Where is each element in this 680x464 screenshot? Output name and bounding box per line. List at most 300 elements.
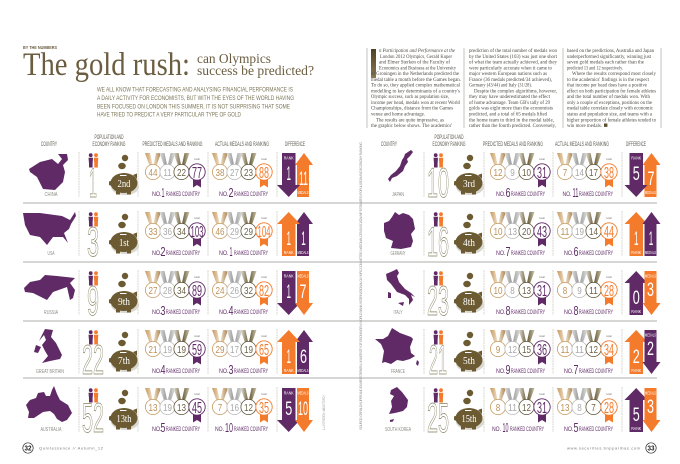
predicted medals: NO.: [496, 251, 506, 257]
difference arrows: RANK: [284, 250, 294, 255]
predicted medals: 77: [192, 165, 202, 182]
predicted medals: NO.: [496, 192, 506, 198]
difference arrows: MEDALS: [645, 274, 656, 278]
footer: left page: Quintessence // Autumn_12: [39, 446, 104, 450]
actual medals: total: [606, 157, 612, 161]
difference arrows: 3: [647, 280, 654, 301]
actual medals: [212, 212, 272, 259]
column headers: left page: ACTUAL MEDALS AND RANKING: [215, 141, 269, 148]
predicted medals: [490, 330, 550, 377]
population and economy rank: [87, 212, 139, 265]
population and economy rank: [88, 153, 139, 206]
actual medals: 28: [604, 283, 614, 300]
actual medals: 23: [244, 167, 253, 179]
actual medals: 19: [575, 226, 584, 238]
predicted medals: RANKED COUNTRY: [166, 369, 200, 375]
article text columns: the home team to third in the medal table,: [469, 117, 555, 123]
footer: left page: 32: [24, 446, 32, 453]
article text columns: modelling to key determinants of a country's: [371, 87, 460, 94]
map: South Korea: [389, 387, 408, 422]
article text columns: [367, 47, 661, 129]
actual medals: [557, 212, 617, 259]
actual medals: 11: [589, 285, 598, 297]
actual medals: total: [606, 275, 612, 279]
difference arrows: 1: [286, 282, 291, 303]
predicted medals: NO.: [152, 192, 162, 198]
predicted medals: 20: [522, 226, 531, 238]
predicted medals: 8: [506, 303, 510, 318]
difference arrows: 7: [648, 169, 654, 190]
article text columns: only a couple of exceptions, positions on the: [567, 99, 653, 106]
population and economy rank: 2nd: [118, 179, 130, 190]
actual medals: 8: [574, 303, 578, 318]
actual medals: RANKED COUNTRY: [579, 310, 613, 316]
difference arrows: [277, 153, 313, 197]
actual medals: 7: [591, 402, 596, 414]
row: Italy: [386, 269, 660, 324]
predicted medals: 13: [508, 226, 517, 238]
actual medals: [212, 153, 272, 200]
difference arrows: [624, 153, 660, 197]
actual medals: total: [606, 334, 612, 338]
predicted medals: NO.: [496, 310, 506, 316]
predicted medals: 12: [494, 167, 503, 179]
row: China: [29, 152, 313, 206]
population and economy rank: 9: [87, 277, 99, 324]
actual medals: 38: [604, 165, 614, 182]
actual medals: 14: [589, 226, 598, 238]
row: Russia: [24, 270, 313, 324]
difference arrows: RANK: [284, 156, 294, 160]
predicted medals: RANKED COUNTRY: [166, 427, 200, 433]
predicted medals: NO.: [496, 369, 506, 375]
map: USA: [23, 212, 76, 245]
population and economy rank: 13th: [116, 414, 132, 425]
predicted medals: RANKED COUNTRY: [166, 251, 200, 257]
difference arrows: MEDALS: [645, 190, 656, 195]
row: Russia: RUSSIA: [44, 310, 58, 316]
actual medals: NO.: [219, 192, 229, 198]
actual medals: RANKED COUNTRY: [234, 251, 268, 257]
difference arrows: RANK: [631, 250, 642, 255]
predicted medals: NO.: [152, 369, 162, 375]
intro paragraph: BEEN FOCUSED ON LONDON THIS SUMMER, IT IS NOT SURPRISING THAT SOME: [97, 103, 290, 110]
difference arrows: RANK: [631, 309, 642, 314]
actual medals: [557, 153, 617, 200]
predicted medals: 13: [148, 402, 158, 414]
predicted medals: total: [194, 216, 200, 220]
predicted medals: [490, 388, 550, 435]
predicted medals: 89: [192, 283, 202, 300]
article text columns: France (36 medals predicted/34 achieved),: [469, 76, 553, 83]
predicted medals: RANKED COUNTRY: [511, 192, 545, 198]
predicted medals: 59: [192, 342, 202, 359]
actual medals: 17: [230, 344, 239, 356]
predicted medals: [145, 271, 205, 318]
predicted medals: total: [194, 157, 200, 161]
article text columns: Germany (43/44) and Italy (31/28).: [469, 82, 532, 89]
article text columns: of Groningen in the Netherlands predicted the: [371, 70, 460, 77]
actual medals: 13: [560, 402, 570, 414]
population and economy rank: 4th: [463, 238, 475, 249]
predicted medals: total: [539, 392, 545, 396]
footer: right page: www.securities.bnpparibas.com: [567, 446, 641, 450]
predicted medals: RANKED COUNTRY: [510, 427, 544, 433]
difference arrows: RANK: [284, 274, 294, 278]
actual medals: 88: [259, 165, 269, 182]
column headers: left page: POPULATION AND: [94, 134, 124, 141]
predicted medals: 27: [148, 285, 158, 297]
population and economy rank: 25: [427, 394, 449, 441]
actual medals: [212, 388, 272, 435]
predicted medals: 11: [164, 167, 172, 179]
article text columns: underperformed significantly, winning just: [567, 53, 651, 60]
actual medals: RANKED COUNTRY: [234, 192, 268, 198]
difference arrows: RANK: [284, 390, 294, 396]
predicted medals: 28: [163, 285, 172, 297]
actual medals: 7: [218, 402, 222, 414]
actual medals: total: [606, 392, 612, 396]
predicted medals: 21: [148, 344, 158, 356]
difference arrows: 2: [633, 347, 640, 368]
actual medals: RANKED COUNTRY: [579, 192, 613, 198]
row: South Korea: [385, 387, 660, 441]
actual medals: NO.: [564, 427, 574, 433]
title: can Olympics: [197, 52, 271, 67]
difference arrows: [277, 212, 313, 256]
difference arrows: 5: [285, 399, 292, 420]
article text columns: based on the predictions, Australia and Japan: [567, 48, 654, 54]
article text columns: medal table correlate closely with economic: [567, 106, 654, 112]
actual medals: 8: [577, 402, 582, 414]
difference arrows: [277, 271, 313, 315]
article text columns: Despite the complex algorithms, however,: [474, 88, 558, 94]
actual medals: RANKED COUNTRY: [579, 251, 613, 257]
column headers: left page: PREDICTED MEDALS AND RANKING: [142, 141, 203, 148]
population and economy rank: 7th: [118, 356, 130, 367]
difference arrows: 2: [647, 339, 654, 360]
predicted medals: [145, 212, 205, 259]
predicted medals: [145, 388, 205, 435]
actual medals: 26: [230, 285, 239, 297]
title: success be predicted?: [197, 64, 314, 79]
predicted medals: RANKED COUNTRY: [166, 192, 200, 198]
predicted medals: 34: [177, 226, 186, 238]
predicted medals: total: [539, 157, 545, 161]
article text columns: they may have underestimated the effect: [469, 93, 550, 100]
actual medals: 46: [216, 226, 225, 238]
population and economy rank: 8th: [463, 297, 475, 308]
predicted medals: 36: [537, 342, 547, 359]
article text columns: Championships, distance from the Games: [371, 105, 453, 112]
population and economy rank: 3: [87, 218, 99, 265]
row: Great Britain: GREAT BRITAIN: [36, 369, 64, 375]
map: Italy: [386, 269, 415, 306]
predicted medals: total: [539, 275, 545, 279]
actual medals: 38: [216, 167, 225, 179]
article text columns: income per head, medals won at recent World: [371, 100, 460, 106]
predicted medals: RANKED COUNTRY: [166, 310, 200, 316]
actual medals: NO.: [564, 251, 574, 257]
row: USA: USA: [48, 251, 55, 257]
predicted medals: [490, 153, 550, 200]
source credit: SOURCE: GERALD KUPER AND ELMER STERKEN, UNIVERSITY OF GRONINGEN; WORLD BANK; INTERNATIONAL OLYMPIC COMMITTEE; NATIONAL CENSUS DATA; IMF ESTIMATES; POPULATION AND ECONOMY RANKING: [359, 142, 363, 430]
article text columns: the graphic below shows. The academics': [371, 123, 452, 129]
actual medals: total: [261, 334, 267, 338]
predicted medals: 12: [508, 344, 517, 356]
actual medals: 44: [604, 224, 614, 241]
predicted medals: 5: [160, 420, 166, 435]
population and economy rank: 1: [89, 159, 97, 206]
difference arrows: [624, 330, 660, 374]
column headers: right page: ECONOMY RANKING: [432, 141, 466, 148]
predicted medals: 22: [177, 167, 186, 179]
actual medals: 17: [589, 167, 598, 179]
article text columns: Where the results correspond most closely: [572, 71, 656, 77]
actual medals: [557, 271, 617, 318]
difference arrows: MEDALS: [298, 390, 308, 396]
actual medals: NO.: [562, 192, 572, 198]
difference arrows: 7: [300, 282, 306, 303]
predicted medals: total: [539, 216, 545, 220]
row: Australia: [26, 386, 313, 441]
actual medals: 8: [563, 285, 567, 297]
article text columns: medal table a month before the Games began.: [371, 76, 461, 83]
row: France: FRANCE: [391, 369, 405, 375]
actual medals: 11: [560, 344, 570, 356]
article text columns: London 2012 Olympics, Gerald Kuper: [380, 54, 452, 60]
difference arrows: MEDALS: [298, 190, 308, 195]
actual medals: 12: [589, 344, 598, 356]
predicted medals: 10: [494, 226, 503, 238]
predicted medals: 44: [148, 167, 158, 179]
intro paragraph: WE ALL KNOW THAT FORECASTING AND ANALYSING FINANCIAL PERFORMANCE IS: [97, 86, 293, 94]
difference arrows: 1: [286, 229, 291, 250]
predicted medals: 19: [163, 402, 172, 414]
actual medals: total: [261, 275, 267, 279]
predicted medals: 19: [177, 344, 186, 356]
predicted medals: 3: [160, 303, 166, 318]
actual medals: total: [261, 392, 267, 396]
actual medals: 34: [604, 342, 614, 359]
population and economy rank: 22: [82, 336, 104, 383]
actual medals: total: [261, 157, 267, 161]
predicted medals: 9: [506, 362, 510, 377]
footer: right page: 33: [648, 446, 655, 453]
predicted medals: 43: [537, 224, 547, 241]
predicted medals: [145, 330, 205, 377]
row: USA: [23, 211, 313, 265]
column headers: right page: ACTUAL MEDALS AND RANKING: [555, 141, 609, 148]
actual medals: 1: [230, 244, 232, 259]
difference arrows: [624, 271, 660, 315]
actual medals: NO.: [219, 251, 229, 257]
article text columns: that income per head does have a positive: [567, 83, 648, 89]
article text columns: effect on both participation for female athletes: [567, 87, 656, 94]
actual medals: RANKED COUNTRY: [579, 369, 613, 375]
actual medals: total: [261, 216, 267, 220]
population and economy rank: 21: [429, 336, 447, 383]
predicted medals: 11: [508, 402, 517, 414]
actual medals: 9: [577, 285, 582, 297]
map: Russia: [24, 275, 75, 300]
population and economy rank: 9th: [118, 297, 130, 308]
map: France: [375, 328, 419, 366]
article text columns: of home advantage. Team GB's tally of 29: [469, 99, 550, 106]
difference arrows: 1: [286, 347, 291, 368]
difference arrows: 1: [301, 229, 306, 250]
population and economy rank: 5th: [463, 356, 475, 367]
predicted medals: 36: [163, 226, 172, 238]
row: Germany: [384, 211, 660, 265]
row: Japan: [388, 150, 660, 206]
difference arrows: 5: [633, 405, 640, 426]
population and economy rank: 10: [427, 159, 449, 206]
predicted medals: RANKED COUNTRY: [511, 369, 545, 375]
predicted medals: 34: [177, 285, 186, 297]
predicted medals: NO.: [152, 310, 162, 316]
actual medals: 11: [560, 226, 570, 238]
column headers: left page: COUNTRY: [41, 141, 57, 148]
predicted medals: total: [194, 275, 200, 279]
actual medals: 27: [230, 167, 239, 179]
title: [23, 47, 314, 83]
actual medals: [557, 330, 617, 377]
actual medals: 32: [244, 285, 253, 297]
actual medals: NO.: [564, 369, 574, 375]
actual medals: 29: [244, 226, 253, 238]
predicted medals: 31: [537, 165, 547, 182]
article text columns: seven gold medals each rather than the: [567, 60, 645, 66]
difference arrows: 6: [300, 347, 307, 368]
intro paragraph: HAVE TRIED TO PREDICT A VERY PARTICULAR TYPE OF GOLD: [97, 112, 241, 119]
article text columns: of what the team actually achieved, and they: [469, 58, 557, 66]
actual medals: 7: [574, 362, 578, 377]
predicted medals: RANKED COUNTRY: [511, 310, 545, 316]
row: Australia: AUSTRALIA: [40, 427, 62, 433]
predicted medals: total: [194, 392, 200, 396]
predicted medals: 15: [522, 344, 531, 356]
article text columns: golds was eight more than the economists: [469, 106, 553, 112]
article text columns: Economics and Business at the University: [379, 65, 456, 71]
article text columns: n Participation and Performance at the: [379, 47, 456, 54]
map: Australia: [26, 386, 72, 422]
actual medals: [557, 388, 617, 435]
difference arrows: MEDALS: [298, 274, 308, 278]
actual medals: 29: [230, 226, 239, 238]
section kicker: BY THE NUMBERS: [23, 45, 57, 50]
difference arrows: RANK: [284, 368, 294, 373]
predicted medals: 9: [496, 344, 500, 356]
difference arrows: 1: [649, 229, 653, 250]
illustration credit: ILLUSTRATION: MAGICTORCH: [322, 395, 326, 430]
difference arrows: MEDALS: [645, 250, 656, 255]
predicted medals: NO.: [152, 427, 162, 433]
actual medals: 104: [258, 224, 271, 241]
population and economy rank: 3rd: [463, 179, 475, 190]
predicted medals: 8: [496, 402, 500, 414]
intro paragraph: [97, 86, 294, 119]
column headers: right page: DIFFERENCE: [626, 141, 646, 148]
difference arrows: [277, 330, 313, 374]
difference arrows: 11: [299, 169, 308, 190]
article text columns: venue and home advantage.: [371, 112, 425, 118]
population and economy rank: 15th: [462, 414, 476, 425]
article text columns: status and population size, and teams with a: [567, 112, 653, 118]
actual medals: 7: [563, 167, 567, 179]
row: China: CHINA: [44, 192, 58, 198]
actual medals: [212, 330, 272, 377]
column headers: right page: COUNTRY: [381, 141, 397, 148]
actual medals: 29: [216, 344, 225, 356]
map: Great Britain: [34, 329, 62, 363]
predicted medals: 45: [192, 400, 202, 417]
predicted medals: 13: [522, 285, 531, 297]
article text columns: predicted, and a total of 65 medals lifted: [469, 110, 547, 118]
article text columns: higher proportion of female athletes tended to: [567, 116, 656, 123]
predicted medals: [490, 271, 550, 318]
population and economy rank: 1st: [119, 238, 129, 249]
difference arrows: 1: [286, 164, 291, 185]
difference arrows: RANK: [631, 368, 642, 373]
actual medals: 24: [216, 285, 225, 297]
column headers: right page: PREDICTED MEDALS AND RANKING: [483, 141, 543, 148]
predicted medals: 31: [537, 283, 547, 300]
article text columns: Olympic success, such as population size,: [371, 94, 450, 100]
predicted medals: 8: [510, 285, 515, 297]
difference arrows: 5: [633, 164, 640, 185]
actual medals: RANKED COUNTRY: [579, 427, 613, 433]
article text columns: by the United States (103) was just one short: [469, 53, 557, 60]
actual medals: 28: [604, 400, 614, 417]
article text columns: The results are quite impressive, as: [376, 117, 444, 123]
predicted medals: 1: [162, 185, 164, 200]
difference arrows: [277, 388, 313, 432]
row: Japan: JAPAN: [392, 192, 404, 198]
map: China: [29, 154, 68, 190]
difference arrows: [624, 212, 660, 256]
predicted medals: 33: [148, 226, 158, 238]
predicted medals: 9: [510, 167, 515, 179]
actual medals: 35: [259, 400, 269, 417]
actual medals: 11: [572, 185, 578, 200]
actual medals: NO.: [219, 369, 229, 375]
actual medals: total: [606, 216, 612, 220]
article text columns: to the academics' findings is in the respect: [567, 76, 649, 83]
article text columns: major western European nations such as: [469, 71, 547, 77]
predicted medals: 13: [177, 402, 186, 414]
predicted medals: RANKED COUNTRY: [511, 251, 545, 257]
predicted medals: 2: [160, 244, 166, 259]
population and economy rank: 16: [427, 218, 449, 265]
population and economy rank: 23: [427, 277, 449, 324]
article text columns: win more medals.: [567, 123, 602, 129]
article text columns: and the total number of medals won. With: [567, 93, 650, 100]
row: Great Britain: [34, 329, 313, 383]
actual medals: NO.: [564, 310, 574, 316]
population and economy rank: [87, 271, 139, 324]
actual medals: RANKED COUNTRY: [234, 310, 268, 316]
actual medals: 14: [575, 167, 584, 179]
difference arrows: 10: [298, 399, 308, 420]
actual medals: RANKED COUNTRY: [234, 369, 268, 375]
column headers: right page: POPULATION AND: [434, 134, 464, 141]
predicted medals: 7: [506, 244, 510, 259]
row: South Korea: SOUTH KOREA: [385, 427, 411, 433]
footer: right page: [567, 443, 656, 453]
predicted medals: NO.: [152, 251, 162, 257]
title: The gold rush:: [23, 47, 190, 83]
